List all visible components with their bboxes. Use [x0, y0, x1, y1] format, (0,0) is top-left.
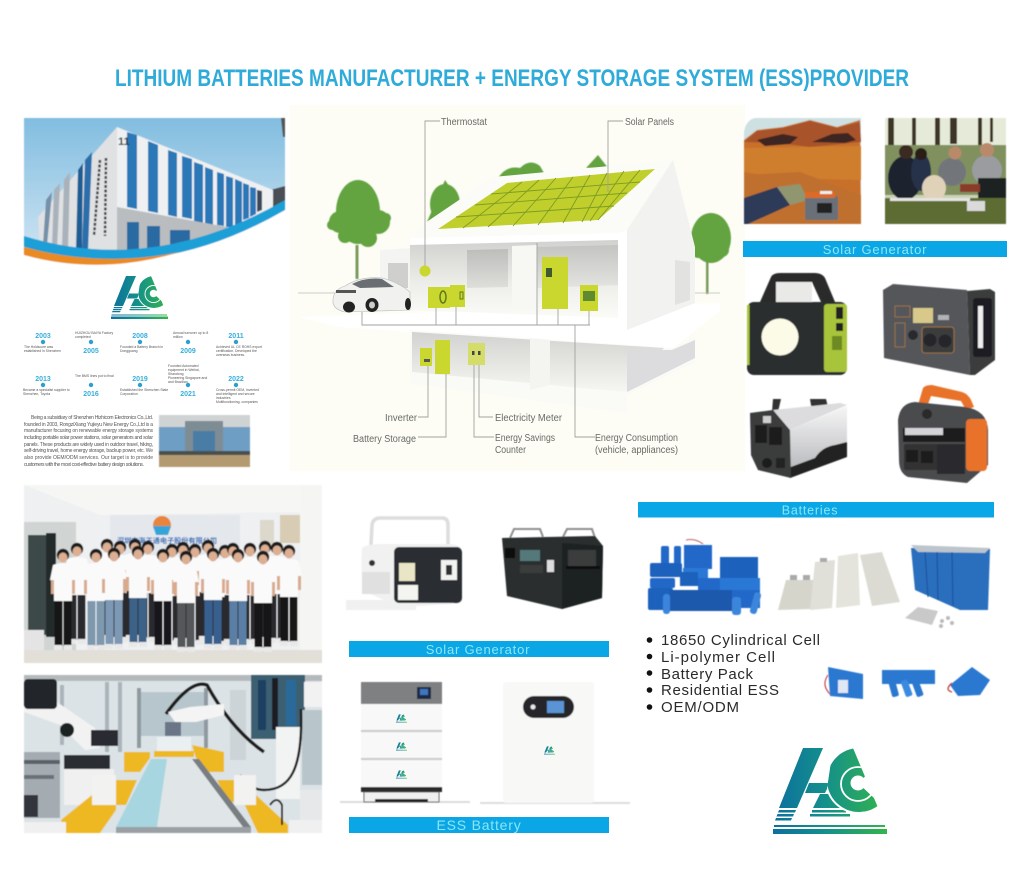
milestone 2013: Became a specialist supplier to: [23, 388, 70, 392]
house labels: Electricity Meter: [495, 413, 563, 424]
milestone 2011: [216, 333, 262, 357]
company description: founded in 2003, RongziXiang Yujieyu New Energy Co.,Ltd is a: [24, 422, 153, 428]
milestone 2019: [120, 376, 168, 396]
house labels: Battery Storage: [353, 434, 416, 445]
milestone 2021: Founded Automated: [168, 364, 199, 368]
logos on stacked battery: [396, 714, 408, 779]
panel: house energy diagram: [290, 105, 745, 471]
banner: solar generator 2: [349, 641, 609, 657]
basement: [410, 330, 695, 413]
milestone 2009: [173, 331, 208, 355]
milestone 2009: million: [173, 335, 183, 339]
photo: team: [24, 485, 322, 663]
banner: batteries: [638, 502, 994, 518]
photo: automated production line: [24, 675, 322, 833]
milestone 2008: Founded a Battery Branch in: [120, 345, 163, 349]
house labels: [353, 117, 678, 456]
wiring lines: [362, 121, 623, 437]
milestone 2005: HUIZHOU BAIYA Factory: [75, 331, 113, 335]
conveyor and yellow frames: [157, 737, 191, 752]
product list: [647, 632, 820, 716]
company description: manufacturer focusing on renewable energy storage systems: [24, 428, 154, 434]
product: black power station: [502, 529, 603, 609]
banner: ESS battery: [349, 817, 609, 833]
milestone 2013: 2013: [35, 376, 51, 383]
list item: Li-polymer Cell: [661, 649, 775, 666]
company sign: [117, 516, 217, 545]
milestone 2016: 2016: [83, 391, 99, 398]
milestone 2008: Dongguang: [120, 349, 138, 353]
interior: [410, 237, 618, 318]
car: [333, 278, 411, 312]
solar panels: [438, 169, 655, 229]
milestone 2003: The Holdscore was: [24, 345, 53, 349]
milestone 2013: [23, 376, 70, 396]
company logo large: [773, 746, 893, 834]
company description: customers with the most cost-effective battery design solutions.: [24, 462, 144, 468]
milestone 2019: Established the Shenzhen State: [120, 388, 168, 392]
list item: Battery Pack: [661, 666, 754, 683]
small battery packs: [825, 667, 990, 699]
company description: Being a subsidiary of Shenzhen Hizhicom Electronics Co.,Ltd.: [31, 415, 153, 421]
milestone 2008: 2008: [132, 333, 148, 340]
logo on wall battery: [544, 746, 556, 755]
milestone 2019: Corporation: [120, 392, 138, 396]
milestone 2011: overseas business.: [216, 353, 245, 357]
company description: panels. These products are widely used in outdoor travel, hiking,: [24, 442, 153, 448]
timeline: [23, 331, 262, 404]
house labels: Solar Panels: [625, 117, 674, 128]
milestone 2019: 2019: [132, 376, 148, 383]
milestone 2021: Shandong: [168, 372, 184, 376]
ground: [298, 303, 720, 348]
photo: desert solar: [744, 118, 861, 224]
milestone 2009: 2009: [180, 348, 196, 355]
product: orange generator: [898, 385, 988, 483]
milestone 2022: Multifunctioning, companies: [216, 400, 258, 404]
list item: OEM/ODM: [661, 699, 739, 716]
milestone 2013: Shenzhen, Toyota: [23, 392, 50, 396]
batteries collage: [648, 540, 762, 615]
prismatic cell block: [905, 545, 990, 628]
photo: headquarters: [159, 415, 250, 467]
cables and right side equipment: [251, 675, 305, 739]
appliances: [420, 257, 598, 374]
milestone 2016: The BMS lines put to final: [75, 374, 114, 378]
milestone 2021: [168, 364, 207, 398]
house labels: Inverter: [385, 413, 418, 424]
milestone 2016: [75, 374, 114, 398]
milestone 2005: 2005: [83, 348, 99, 355]
house labels: Thermostat: [441, 117, 487, 128]
house labels: Energy Consumption: [595, 433, 678, 444]
milestone 2003: [24, 333, 61, 353]
company logo small: [111, 275, 171, 319]
banner: ESS battery: ESS Battery: [436, 817, 522, 833]
milestone 2003: 2003: [35, 333, 51, 340]
banner: solar generator 2: Solar Generator: [426, 642, 530, 657]
milestone 2021: and Brazilian: [168, 380, 188, 384]
milestone 2011: 2011: [228, 333, 244, 340]
milestone 2022: and intelligent and secure: [216, 392, 255, 396]
house labels: (vehicle, appliances): [595, 445, 678, 456]
milestone 2022: Cross-permit OEM, Invented: [216, 388, 259, 392]
house labels: Energy Savings: [495, 433, 555, 444]
trees and hedges: [327, 155, 731, 294]
wave bands: [24, 210, 285, 276]
roof: [410, 160, 673, 242]
list item: Residential ESS: [661, 682, 779, 699]
milestone 2003: established in Shenzhen: [24, 349, 61, 353]
milestone 2021: Pioneering Singapore and: [168, 376, 207, 380]
product: silver generator: [750, 399, 847, 478]
milestone 2021: equipment in Weihai,: [168, 368, 200, 372]
product: grey generator: [883, 284, 995, 375]
product: stacked ESS battery: [340, 682, 470, 803]
milestone 2022: industries: [216, 396, 231, 400]
banner: solar generator: Solar Generator: [823, 242, 927, 257]
garage: [380, 248, 412, 295]
photo: company building with wave: [24, 118, 285, 276]
company description: also provide OEM/ODM services. Our target is to provide: [24, 455, 153, 461]
house labels: Counter: [495, 445, 527, 456]
milestone 2005: completed: [75, 335, 91, 339]
list item: 18650 Cylindrical Cell: [661, 632, 820, 649]
milestone 2008: [120, 333, 163, 353]
milestone 2011: certification. Developed the: [216, 349, 257, 353]
company description: including portable solar power stations, solar generators and solar: [24, 435, 153, 441]
company description: [24, 415, 154, 468]
milestone 2009: Annual turnover up to 8: [173, 331, 208, 335]
photo: company building with wave: 11: [118, 136, 130, 148]
company sign: 深圳市海王通电子股份有限公司: [117, 536, 217, 545]
photo: picnic: [885, 118, 1006, 224]
banner: solar generator: [743, 241, 1007, 257]
milestone 2022: 2022: [228, 376, 244, 383]
banner: batteries: Batteries: [782, 504, 838, 518]
product: wall mounted ESS battery: [480, 682, 630, 804]
milestone 2022: [216, 376, 259, 404]
product: green generator: [747, 273, 847, 375]
milestone 2021: 2021: [180, 391, 196, 398]
milestone 2005: [75, 331, 113, 355]
pouch cells: [778, 552, 900, 610]
milestone 2011: Achieved UL CE ROHS export: [216, 345, 262, 349]
company description: self-driving travel, home energy storage, backup power, etc. We: [24, 448, 153, 454]
product: white portable generator: [346, 518, 462, 610]
